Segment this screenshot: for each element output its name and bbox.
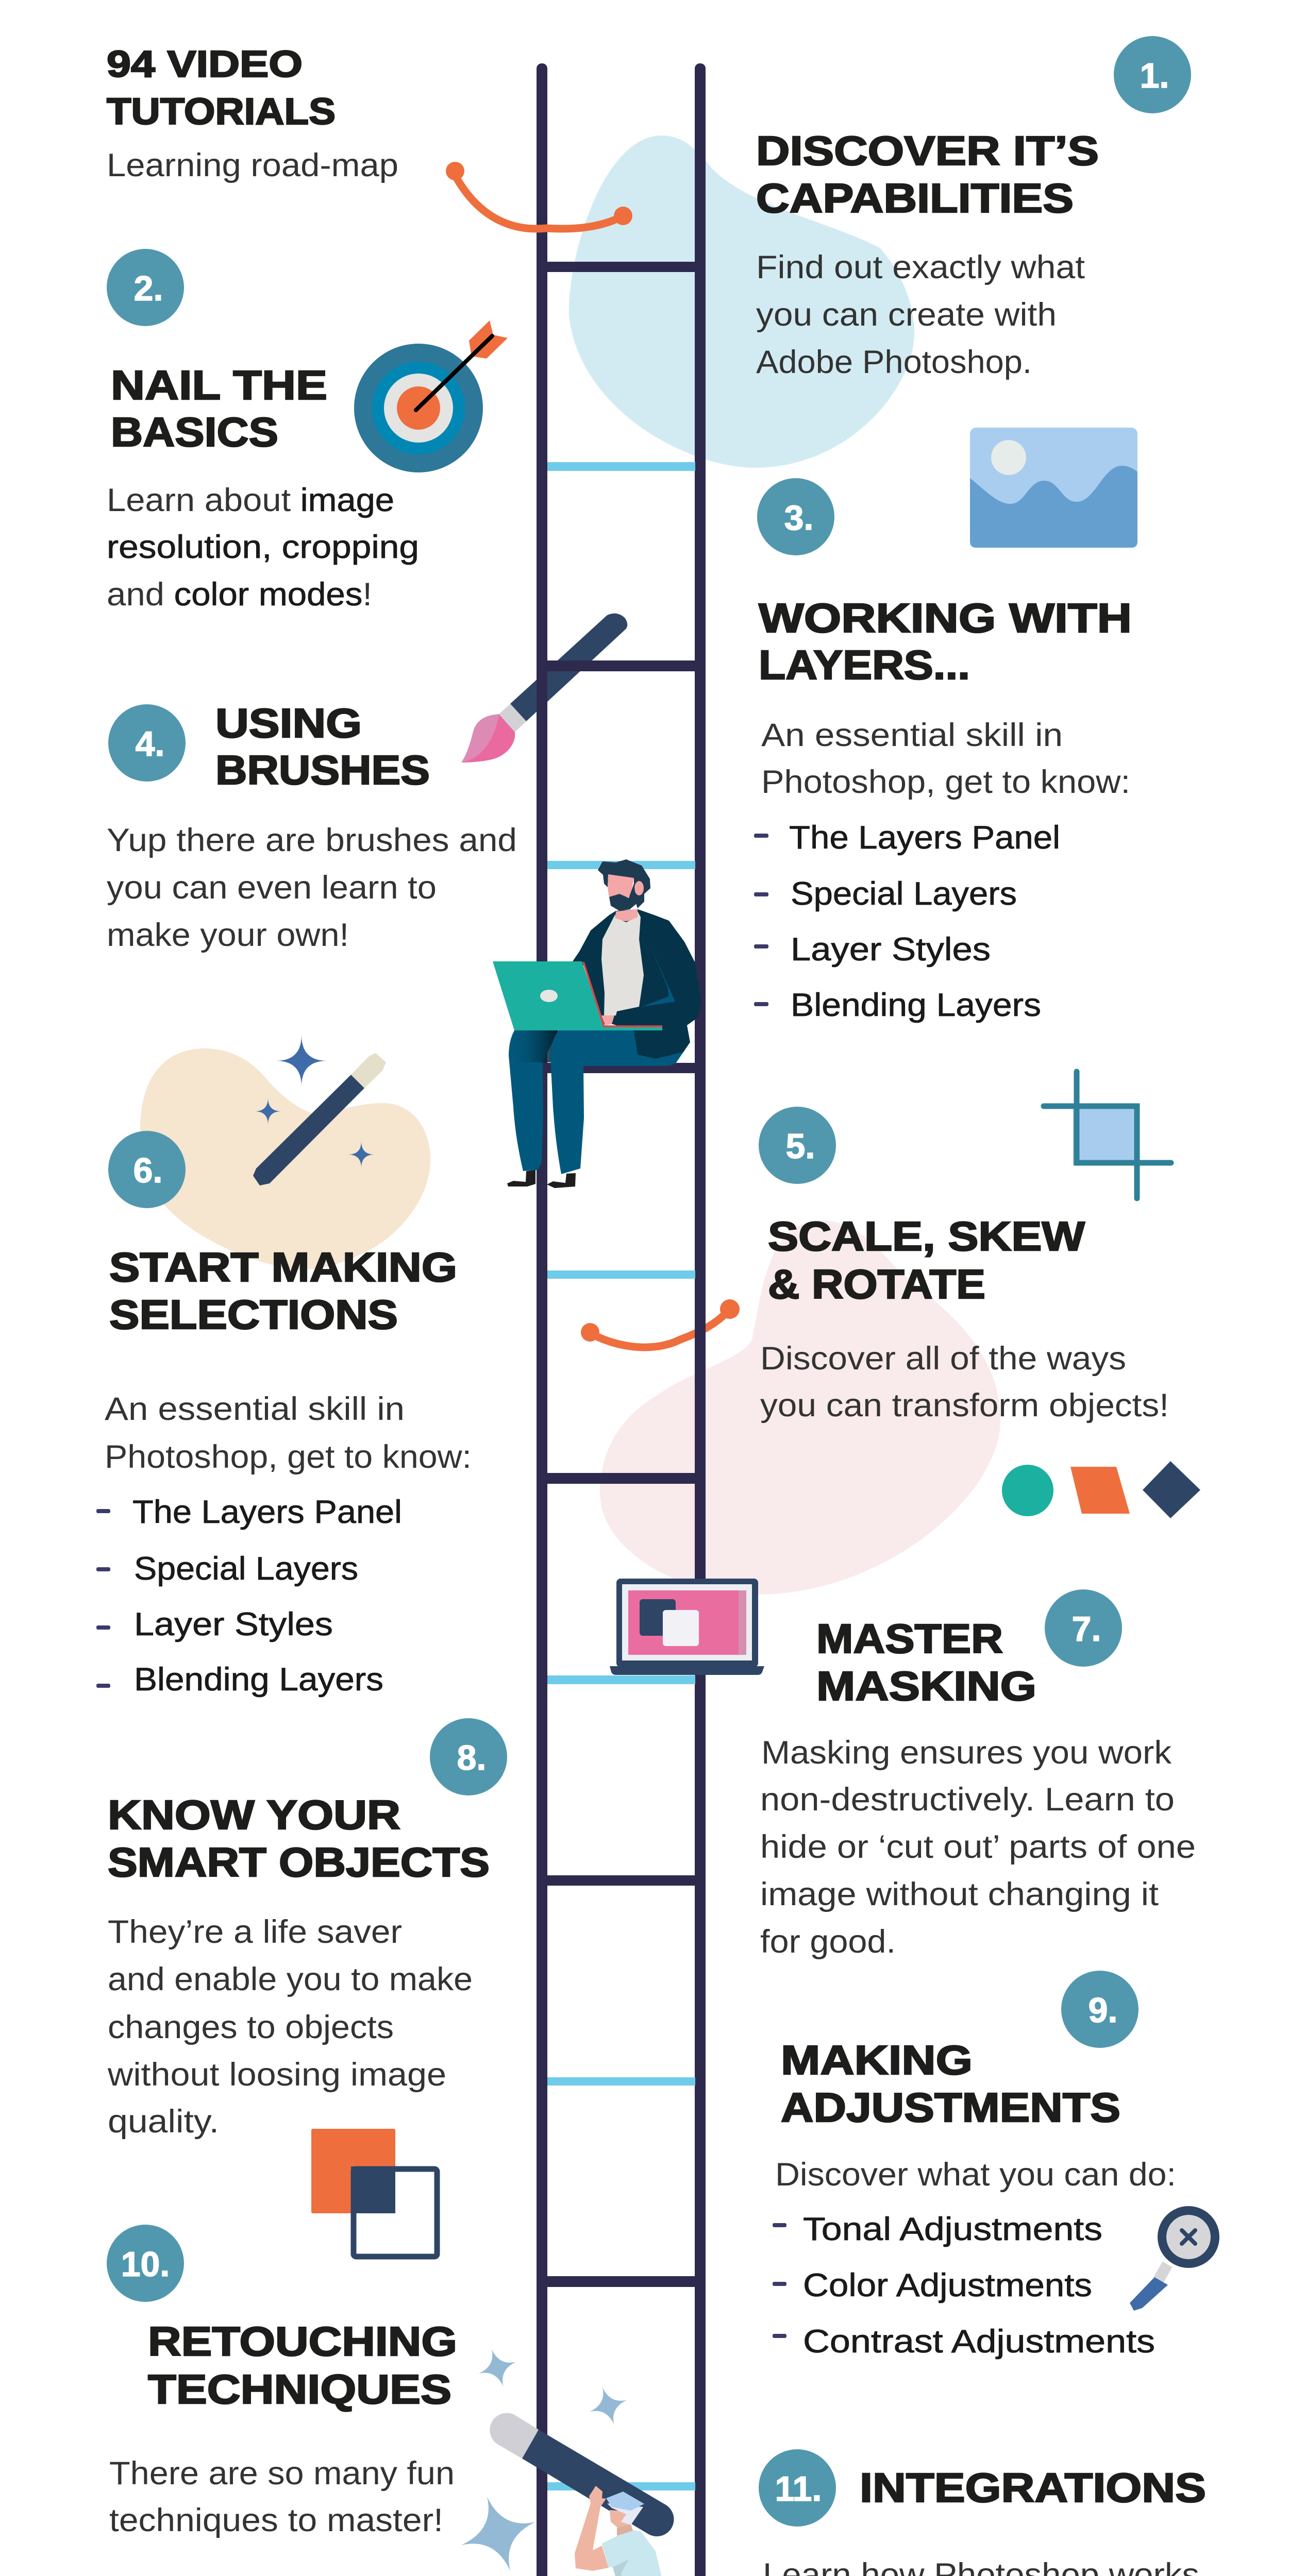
section 3: The Layers Panel (789, 820, 1060, 856)
section 7: image without changing it (760, 1876, 1159, 1912)
number badge 5: 5. (786, 1127, 815, 1166)
section 4 (107, 700, 517, 953)
number badge 2: 2. (134, 269, 163, 308)
section 4: you can even learn to (107, 870, 437, 906)
intro heading (107, 44, 398, 183)
section 5 (760, 1213, 1169, 1423)
section 1: Find out exactly what (756, 249, 1085, 285)
section 7: MASKING (816, 1663, 1036, 1709)
section 7 (760, 1616, 1196, 1960)
icon: shapes (1002, 1461, 1200, 1518)
section 5: & ROTATE (768, 1261, 985, 1307)
icon: big brush tool (490, 2413, 674, 2536)
number badge 11: 11. (775, 2469, 822, 2509)
number badge 11 (759, 2449, 836, 2527)
section 6: Special Layers (134, 1551, 358, 1587)
section 9: ADJUSTMENTS (781, 2084, 1120, 2130)
section 8: and enable you to make (108, 1961, 473, 1997)
section 8: SMART OBJECTS (108, 1839, 490, 1885)
number badge 1 (1114, 36, 1191, 113)
section 6: An essential skill in (105, 1391, 405, 1427)
section 7: Masking ensures you work (761, 1735, 1172, 1771)
section 2: NAIL THE (111, 362, 327, 408)
icon: masking laptop (610, 1579, 764, 1675)
section 6 (96, 1244, 472, 1698)
number badge 1: 1. (1140, 56, 1169, 95)
section 10 (109, 2318, 457, 2538)
section 6: Blending Layers (134, 1662, 383, 1698)
number badge 3: 3. (784, 498, 813, 537)
intro heading: Learning road-map (107, 147, 398, 183)
section 4: BRUSHES (215, 747, 430, 793)
section 11: INTEGRATIONS (860, 2465, 1206, 2511)
icon: target with arrow (354, 320, 508, 472)
blob: pink (600, 1221, 1000, 1595)
connector: orange curve 2 (581, 1299, 740, 1347)
section 6: Layer Styles (134, 1606, 333, 1642)
ladder (537, 63, 706, 2576)
section 6: Photoshop, get to know: (105, 1439, 472, 1475)
intro heading: TUTORIALS (107, 91, 336, 132)
icon: paint brush (461, 614, 627, 762)
section 1: you can create with (756, 297, 1057, 333)
section 3: Layer Styles (791, 931, 991, 968)
icon: picture (970, 428, 1137, 548)
figure: man sitting with laptop (493, 859, 701, 1188)
number badge 6 (108, 1131, 186, 1208)
number badge 10: 10. (121, 2245, 170, 2284)
section 3: Special Layers (791, 876, 1017, 912)
section 1: CAPABILITIES (756, 175, 1074, 221)
section 3: WORKING WITH (759, 595, 1132, 641)
number badge 4: 4. (136, 724, 164, 764)
number badge 7 (1045, 1589, 1122, 1667)
section 10: There are so many fun (109, 2455, 455, 2492)
section 2: and color modes ! (107, 577, 372, 613)
number badge 3 (757, 478, 834, 555)
section 7: for good. (760, 1924, 896, 1960)
section 2: BASICS (111, 409, 278, 455)
section 3: An essential skill in (761, 717, 1063, 753)
section 6: START MAKING (109, 1244, 457, 1290)
section 11 (762, 2465, 1206, 2576)
section 9: Discover what you can do: (775, 2157, 1176, 2193)
section 3: Photoshop, get to know: (761, 764, 1130, 800)
section 6: SELECTIONS (109, 1292, 398, 1337)
number badge 8 (430, 1718, 507, 1795)
icon: magic wand with stars (253, 1035, 386, 1185)
section 8: KNOW YOUR (108, 1792, 400, 1838)
number badge 4 (108, 704, 186, 782)
section 9: Contrast Adjustments (803, 2324, 1155, 2360)
number badge 2 (107, 249, 184, 326)
section 9: Tonal Adjustments (803, 2211, 1102, 2247)
icon: magnifier (1130, 2206, 1219, 2311)
icon: sparkles (461, 2349, 627, 2571)
icon: overlapping squares (311, 2129, 437, 2257)
icon: crop tool (1044, 1072, 1171, 1198)
number badge 6: 6. (133, 1151, 162, 1190)
section 4: USING (215, 700, 362, 746)
section 8: quality. (108, 2104, 219, 2140)
section 8: without loosing image (107, 2057, 446, 2093)
section 2: Learn about image (107, 482, 394, 518)
section 3: Blending Layers (791, 987, 1041, 1023)
section 3: LAYERS... (759, 642, 970, 688)
section 8: They’re a life saver (108, 1914, 402, 1950)
section 6: The Layers Panel (132, 1494, 402, 1530)
section 5: Discover all of the ways (760, 1341, 1126, 1377)
section 10: TECHNIQUES (148, 2366, 451, 2412)
number badge 5 (759, 1107, 836, 1184)
section 9 (773, 2037, 1176, 2360)
section 2: resolution, cropping (107, 529, 419, 565)
section 5: you can transform objects! (760, 1387, 1169, 1423)
section 9: Color Adjustments (803, 2267, 1092, 2303)
blob: beige (140, 1048, 430, 1269)
section 9: MAKING (781, 2037, 973, 2083)
intro heading: 94 VIDEO (107, 44, 303, 85)
section 5: SCALE, SKEW (768, 1213, 1085, 1259)
section 8 (107, 1792, 490, 2140)
section 3 (754, 595, 1132, 1023)
section 1: DISCOVER IT’S (756, 128, 1099, 174)
section 7: hide or ‘cut out’ parts of one (760, 1829, 1196, 1865)
number badge 7: 7. (1072, 1609, 1101, 1649)
blob: light blue top (569, 135, 914, 468)
number badge 10 (107, 2225, 184, 2302)
section 1: Adobe Photoshop. (756, 344, 1032, 380)
number badge 9 (1061, 1971, 1139, 2048)
section 10: RETOUCHING (148, 2318, 457, 2364)
section 4: make your own! (107, 917, 349, 953)
section 7: MASTER (816, 1616, 1003, 1662)
number badge 8: 8. (457, 1738, 486, 1777)
section 7: non-destructively. Learn to (760, 1782, 1175, 1818)
section 4: Yup there are brushes and (107, 822, 517, 858)
section 8: changes to objects (108, 2009, 394, 2045)
figure: kneeling person (570, 2486, 738, 2576)
connector: orange curve 1 (446, 162, 632, 229)
number badge 9: 9. (1089, 1991, 1117, 2030)
section 1 (756, 128, 1099, 380)
section 2 (107, 362, 419, 613)
section 10: techniques to master! (109, 2502, 443, 2538)
